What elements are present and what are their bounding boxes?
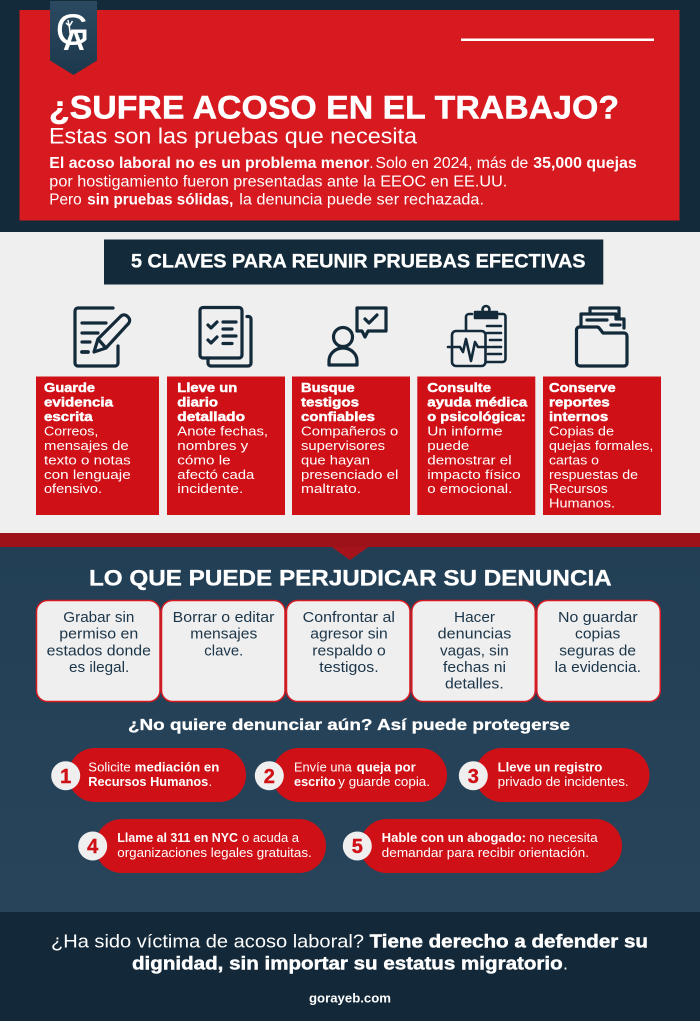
intro text: Pero	[49, 191, 82, 208]
logo ribbon	[50, 1, 97, 75]
subtitle: Estas son las pruebas que necesita	[49, 123, 417, 148]
warning box 3	[286, 600, 410, 702]
icon: medical clipboard	[448, 306, 506, 366]
option pill 3: privado de incidentes.	[498, 775, 629, 789]
card: ayuda médica	[417, 376, 535, 515]
card: diario detallado: nombres y	[177, 438, 249, 453]
card: diario detallado: Lleve un	[177, 380, 237, 395]
option pill 4: 4	[87, 836, 99, 858]
option pill 1: Recursos Humanos	[88, 775, 208, 789]
option pill 1: mediación en	[135, 761, 219, 775]
warning box 4: denuncias	[438, 626, 511, 642]
warning box 3: Confrontar al	[303, 610, 395, 626]
warning box 3: agresor sin	[310, 626, 388, 642]
warning box 4	[412, 600, 535, 702]
card: ayuda médica: o psicológica:	[427, 409, 526, 424]
card: ayuda médica: ayuda médica	[427, 394, 528, 410]
warning box 1: permiso en	[59, 626, 138, 642]
option pill 5: 5	[352, 836, 363, 858]
icon: document and pencil	[75, 308, 130, 366]
warning box 5: la evidencia.	[555, 660, 641, 676]
icon: witness with speech bubble	[329, 308, 386, 365]
warning box 5: No guardar	[558, 610, 638, 626]
call to action	[51, 932, 648, 974]
card: reportes internos: cartas o	[549, 452, 599, 467]
card: evidencia escrita: con lenguaje	[44, 467, 131, 482]
card: testigos confiables: testigos	[301, 394, 359, 410]
intro text: Solo en 2024, más de	[376, 155, 528, 172]
option pill 2: Envíe una	[294, 761, 352, 775]
call to action: ¿Ha sido víctima de acoso laboral?	[51, 932, 364, 952]
card: ayuda médica: Consulte	[427, 380, 491, 395]
option pill 3: 3	[468, 766, 479, 788]
card: reportes internos: internos	[549, 409, 608, 424]
intro text: El acoso laboral no es un problema menor	[49, 155, 369, 172]
card: reportes internos	[543, 376, 661, 515]
option pill 1	[51, 748, 246, 802]
warning box 2: clave.	[204, 643, 243, 659]
warning box 3: respaldo o	[312, 643, 386, 659]
card: diario detallado: diario	[177, 394, 218, 410]
warning box 2: mensajes	[190, 626, 257, 642]
card: ayuda médica: puede	[427, 438, 469, 453]
card: reportes internos: Recursos	[549, 481, 608, 496]
card: reportes internos: Humanos.	[549, 496, 615, 510]
card: diario detallado: incidente.	[177, 481, 243, 496]
option pill 2: queja por	[357, 761, 416, 775]
subheading: ¿No quiere denunciar aún? Así puede protegerse	[128, 717, 570, 734]
icon: folder	[576, 308, 627, 366]
title: ¿SUFRE ACOSO EN EL TRABAJO?	[49, 89, 619, 125]
option pill 4: Llame al 311 en NYC	[117, 831, 238, 845]
option pill 1: 1	[60, 766, 71, 788]
warning box 2	[162, 600, 285, 702]
warning box 1: Grabar sin	[63, 610, 134, 626]
option pill 4: organizaciones legales gratuitas.	[117, 846, 312, 860]
card: evidencia escrita: ofensivo.	[44, 481, 102, 496]
website: gorayeb.com	[309, 992, 391, 1006]
intro text: la denuncia puede ser rechazada.	[239, 191, 484, 208]
option pill 2: 2	[264, 766, 275, 788]
section heading	[104, 240, 603, 284]
icon: checklist	[200, 308, 251, 366]
card: testigos confiables: Compañeros o	[301, 424, 398, 438]
decorative line	[461, 38, 654, 41]
option pill 2	[255, 748, 447, 802]
card: diario detallado: detallado	[177, 409, 245, 424]
option pill 1: Solicite	[88, 761, 131, 775]
intro text: 35,000 quejas	[533, 155, 637, 172]
card: evidencia escrita: Guarde	[44, 380, 95, 395]
intro text	[49, 155, 637, 208]
warning box 4: vagas, sin	[440, 643, 509, 659]
card: diario detallado: cómo le	[177, 452, 231, 467]
option pill 4: o acuda a	[242, 831, 299, 845]
card: ayuda médica: o emocional.	[427, 481, 512, 496]
card: testigos confiables: supervisores	[301, 438, 386, 453]
warning box 2: Borrar o editar	[173, 610, 275, 626]
card: testigos confiables	[292, 376, 410, 515]
intro text: sin pruebas sólidas,	[87, 191, 233, 208]
option pill 5	[343, 819, 622, 873]
warning box 4: Hacer	[454, 610, 495, 626]
option pill 2: escrito	[294, 775, 336, 789]
call to action: .	[563, 954, 568, 974]
logo ribbon: A	[63, 24, 85, 57]
panel: hero header	[0, 0, 700, 232]
panel: footer	[0, 912, 700, 1021]
card: ayuda médica: Un informe	[427, 424, 503, 438]
option pill 5: demandar para recibir orientación.	[382, 846, 589, 860]
option pill 5: Hable con un abogado:	[382, 831, 526, 845]
warning box 5: seguras de	[559, 643, 636, 659]
warning box 5	[537, 600, 660, 702]
warning box 5: copias	[575, 626, 620, 642]
option pill 1: .	[209, 775, 212, 789]
intro text: .	[369, 155, 374, 172]
call to action: Tiene derecho a defender su	[370, 932, 648, 952]
card: testigos confiables: confiables	[301, 409, 375, 424]
warning box 4: detalles.	[445, 676, 504, 692]
warning box 4: fechas ni	[443, 660, 506, 676]
warning box 1: estados donde	[47, 643, 151, 659]
card: reportes internos: Conserve	[549, 380, 616, 395]
card: diario detallado	[167, 376, 285, 515]
warning box 3: testigos.	[319, 660, 379, 676]
card: ayuda médica: demostrar el	[427, 452, 512, 467]
card: ayuda médica: impacto físico	[427, 467, 521, 482]
card: evidencia escrita	[36, 376, 159, 515]
card: reportes internos: quejas formales,	[549, 438, 653, 453]
section heading: 5 CLAVES PARA REUNIR PRUEBAS EFECTIVAS	[131, 252, 586, 272]
intro text: por hostigamiento fueron presentadas ante la EEOC en EE.UU.	[49, 174, 507, 191]
warning box 1: es ilegal.	[69, 660, 129, 676]
call to action: dignidad, sin importar su estatus migratorio	[132, 954, 563, 974]
card: testigos confiables: Busque	[301, 380, 355, 395]
section heading: LO QUE PUEDE PERJUDICAR SU DENUNCIA	[89, 566, 612, 591]
card: diario detallado: Anote fechas,	[177, 424, 268, 438]
panel: lo que puede perjudicar	[0, 533, 700, 912]
option pill 4	[78, 819, 326, 873]
card: evidencia escrita: texto o notas	[44, 452, 131, 467]
card: reportes internos: respuestas de	[549, 467, 638, 482]
logo ribbon: G	[56, 6, 90, 54]
card: reportes internos: reportes	[549, 394, 610, 410]
option pill 2: y guarde copia.	[338, 775, 430, 789]
warning box 1	[36, 600, 160, 702]
option pill 5: no necesita	[529, 831, 598, 845]
card: testigos confiables: que hayan	[301, 452, 370, 467]
option pill 3: Lleve un registro	[498, 761, 603, 775]
card: evidencia escrita: mensajes de	[44, 438, 129, 453]
card: evidencia escrita: evidencia	[44, 394, 114, 410]
card: reportes internos: Copias de	[549, 424, 614, 438]
card: testigos confiables: presenciado el	[301, 467, 398, 482]
option pill 3	[459, 748, 650, 802]
card: testigos confiables: maltrato.	[301, 481, 361, 496]
panel: 5 claves	[0, 232, 700, 533]
card: evidencia escrita: escrita	[44, 409, 94, 424]
card: evidencia escrita: Correos,	[44, 424, 98, 438]
card: diario detallado: afectó cada	[177, 467, 255, 482]
